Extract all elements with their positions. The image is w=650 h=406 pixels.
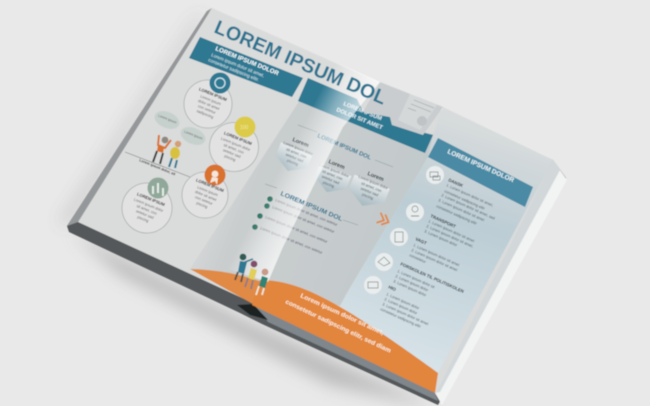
circle: top info: Lorem ipsum: [200, 94, 221, 106]
speech bubbles: [152, 108, 208, 148]
orange footer: right: [252, 280, 438, 393]
paper clipped document: [363, 82, 443, 135]
circle: green info: Lorem ipsum dolor: [133, 198, 165, 213]
circle: green info: sit amet, con: [136, 204, 157, 216]
circle: top info: dolor sit amet: [197, 99, 221, 111]
right page: [340, 107, 553, 375]
speech bubbles: Lorem ipsum: [158, 114, 177, 125]
centre banner: LOREM IPSUM: [342, 101, 383, 122]
shield column one: setetur sad: [285, 153, 304, 163]
right page list text: DANSK: [448, 177, 465, 189]
right page list text: consetetur sadipscing elitr: [436, 204, 478, 226]
right page list text: HIO: [388, 284, 397, 292]
left banner: [189, 37, 303, 97]
shield column two: sit amet, con: [322, 169, 343, 181]
right page list text: 1. Lorem ipsum dolor sit: [397, 269, 436, 290]
right page list text: 2. Lorem ipsum dolor sit amet,: [426, 224, 474, 249]
numbered list: Lorem ipsum dolor sit amet, con setetur: [265, 215, 329, 244]
right page list text: 1. Lorem ipsum dolor sit amet: [413, 243, 461, 268]
illustration: two people: [125, 135, 190, 177]
right page list text: 1. Lorem ipsum dolor: [386, 292, 420, 311]
right page list text: [380, 177, 495, 329]
shield column two: setetur sad: [321, 175, 340, 185]
shield column two: piscing: [322, 180, 335, 189]
circle: yellow info: LOREM IPSUM: [223, 130, 253, 146]
chevron arrows: [376, 213, 391, 227]
circle: orange info: dolor sit amet: [194, 190, 218, 202]
right page list text: VAGT: [415, 236, 428, 246]
numbered list: Lorem ipsum dolor sit amet, con setetur: [275, 198, 339, 227]
shield column two: Lorem: [327, 159, 345, 171]
right page list text: 3. Lorem ipsum dolor sit amet: [438, 198, 486, 223]
shield column three: [345, 168, 392, 213]
main title: LOREM IPSUM DOL: [211, 16, 390, 110]
circle: yellow info: 100: [240, 125, 249, 131]
circle: top info: con setetur: [197, 104, 217, 115]
right page list text: TRANSPORT: [430, 213, 457, 229]
illustration: three people: [235, 254, 268, 295]
right page icons: [364, 166, 444, 294]
right page list text: consetetur sadipscing elitr: [444, 189, 486, 211]
right page list text: consetetur sadipscing elitr: [380, 307, 422, 329]
left banner: consetetur sadipscing elitr.: [208, 57, 260, 82]
gloss highlight: [225, 50, 380, 282]
speech bubbles: Lorem ipsum: [184, 130, 203, 141]
heading: centre upper: [298, 125, 393, 167]
heading: centre lower: [265, 184, 358, 225]
shield column one: [272, 134, 317, 177]
shield column three: Lorem ipsum dolor: [358, 175, 389, 191]
centre banner: [298, 78, 433, 153]
left banner: LOREM IPSUM DOLOR: [214, 45, 280, 77]
illustration: two people: Lorem ipsum dolor, sit: [139, 158, 177, 177]
circle: orange info: piscing: [196, 201, 208, 209]
numbered list: Lorem ipsum dolor sit amet, con setetur: [272, 205, 336, 234]
circle: yellow info: Lorem ipsum dolor: [220, 137, 252, 152]
circle: green info: setetur sad: [135, 209, 154, 220]
shield column one: sit amet, con: [286, 147, 307, 159]
circle: green info: [122, 178, 172, 233]
circle: top info: sadipscing: [196, 109, 214, 119]
book shadow: [72, 232, 437, 406]
shield column two: [311, 156, 353, 198]
shield column three: Lorem: [366, 171, 384, 183]
circle: orange info: Lorem ipsum: [197, 185, 218, 197]
orange footer: left: [190, 269, 262, 304]
book cover and page block: [67, 8, 567, 405]
circle: top info: LOREM IPSUM: [198, 86, 228, 102]
shield column one: piscing: [286, 158, 299, 167]
footer text: consetetur sadipscing elitr, sed diam: [284, 298, 392, 355]
right page list text: 3. Lorem ipsum dolor sit amet: [382, 302, 430, 327]
heading: centre lower: LOREM IPSUM DOL: [279, 190, 344, 223]
right page list text: 2. Lorem ipsum dolor: [395, 274, 429, 293]
circle: top info: [184, 72, 232, 128]
right page list text: 3. Lorem ipsum dolor: [393, 279, 427, 298]
right banner: LOREM IPSUM DOLOR: [446, 148, 515, 184]
centre page: [190, 100, 435, 306]
circle: yellow info: piscing: [224, 154, 236, 162]
right page list text: FORSKOLEN TIL POLITISKOLEN: [400, 261, 465, 294]
circle: green info: LOREM IPSUM: [136, 191, 166, 207]
shield column three: sit amet, con: [361, 181, 382, 193]
circle: yellow info: [210, 116, 258, 172]
right page list text: 1. Lorem ipsum dolor sit amet,: [446, 183, 494, 208]
circle: yellow info: setetur sad: [222, 148, 241, 159]
right page list text: 2. Lorem ipsum dolor sit amet, sed: [441, 193, 495, 221]
right page list text: 2. Lorem ipsum dolor: [384, 297, 418, 316]
right page list text: 3. Lorem ipsum dolor: [424, 229, 458, 248]
shield column one: Lorem: [291, 137, 309, 149]
centre banner: DOLOR SIT AMET: [335, 107, 384, 132]
shield column one: Lorem ipsum dolor: [283, 141, 314, 157]
shield column three: piscing: [361, 192, 374, 201]
left edge shadow: [60, 14, 205, 225]
shield column two: Lorem ipsum dolor: [319, 163, 350, 179]
circle: orange info: [182, 164, 228, 218]
numbered list: [252, 196, 339, 255]
right banner: [428, 138, 533, 207]
circle: green info: piscing: [137, 215, 149, 223]
right page list text: consetetur: [409, 253, 427, 264]
right page list text: 1. Lorem ipsum dolor sit amet: [428, 219, 476, 244]
circle: orange info: con setetur: [194, 195, 214, 206]
footer text: Lorem ipsum dolor sit amet,: [299, 292, 385, 337]
shield column three: setetur sad: [360, 187, 379, 197]
circle: orange info: LOREM IPSUM: [195, 177, 225, 193]
base page spread: [78, 8, 553, 393]
right page list text: 2. Lorem ipsum dolor sit amet: [411, 248, 459, 273]
circle: yellow info: sit amet, con: [223, 143, 244, 155]
left banner: Lorem ipsum dolor sit amet,: [211, 52, 265, 78]
numbered list: Lorem ipsum dolor sit amet, con setetur: [260, 226, 324, 255]
heading: centre upper: LOREM IPSUM DOL: [316, 133, 372, 162]
